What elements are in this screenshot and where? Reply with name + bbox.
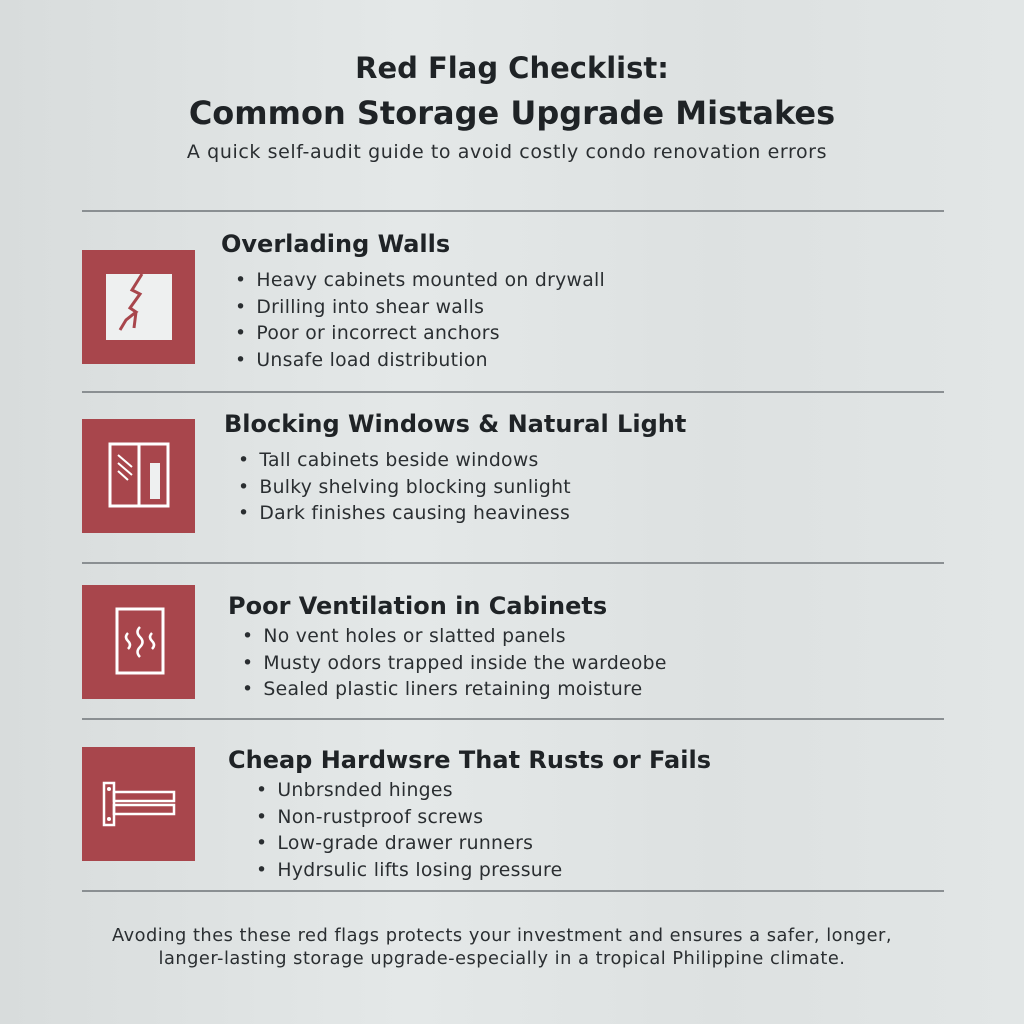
section: overloading walls: Heavy cabinets mounted on drywall	[256, 270, 605, 291]
section: ventilation	[228, 592, 667, 700]
section: overloading walls: Drilling into shear walls	[256, 296, 484, 318]
icon: cracked wall	[82, 250, 195, 364]
section: overloading walls: Overlading Walls	[221, 230, 450, 258]
section: blocking windows: Tall cabinets beside windows	[259, 450, 539, 471]
section: blocking windows: Dark finishes causing heaviness	[259, 503, 570, 524]
icon: hinge hardware	[82, 747, 195, 861]
icon: window	[82, 419, 195, 533]
section: hardware: Low-grade drawer runners	[277, 833, 533, 854]
section: blocking windows: Bulky shelving blocking sunlight	[259, 476, 571, 498]
footer note: Avoding thes these red flags protects your investment and ensures a safer, longer,	[112, 925, 892, 946]
title	[189, 51, 835, 132]
section: hardware	[228, 746, 711, 880]
section: hardware: Non-rustproof screws	[277, 806, 483, 828]
section: ventilation: Poor Ventilation in Cabinets	[228, 592, 607, 620]
section: ventilation: Sealed plastic liners retaining moisture	[263, 679, 643, 700]
title: Red Flag Checklist:	[355, 51, 669, 85]
footer note: langer-lasting storage upgrade-especially in a tropical Philippine climate.	[159, 948, 845, 969]
section: hardware: Hydrsulic lifts losing pressure	[277, 860, 562, 880]
footer note	[112, 925, 892, 969]
section: blocking windows: Blocking Windows & Natural Light	[224, 410, 686, 438]
section: ventilation: No vent holes or slatted panels	[263, 626, 566, 647]
section: overloading walls: Unsafe load distribution	[256, 350, 488, 370]
icon: ventilation	[82, 585, 195, 699]
section: overloading walls	[221, 230, 605, 370]
title: Common Storage Upgrade Mistakes	[189, 94, 835, 132]
section: ventilation: Musty odors trapped inside the wardeobe	[263, 652, 667, 674]
section: overloading walls: Poor or incorrect anchors	[256, 323, 500, 344]
section: blocking windows	[224, 410, 686, 524]
section: hardware: Cheap Hardwsre That Rusts or Fails	[228, 746, 711, 774]
section: hardware: Unbrsnded hinges	[277, 780, 453, 801]
subtitle: A quick self-audit guide to avoid costly condo renovation errors	[187, 141, 827, 163]
